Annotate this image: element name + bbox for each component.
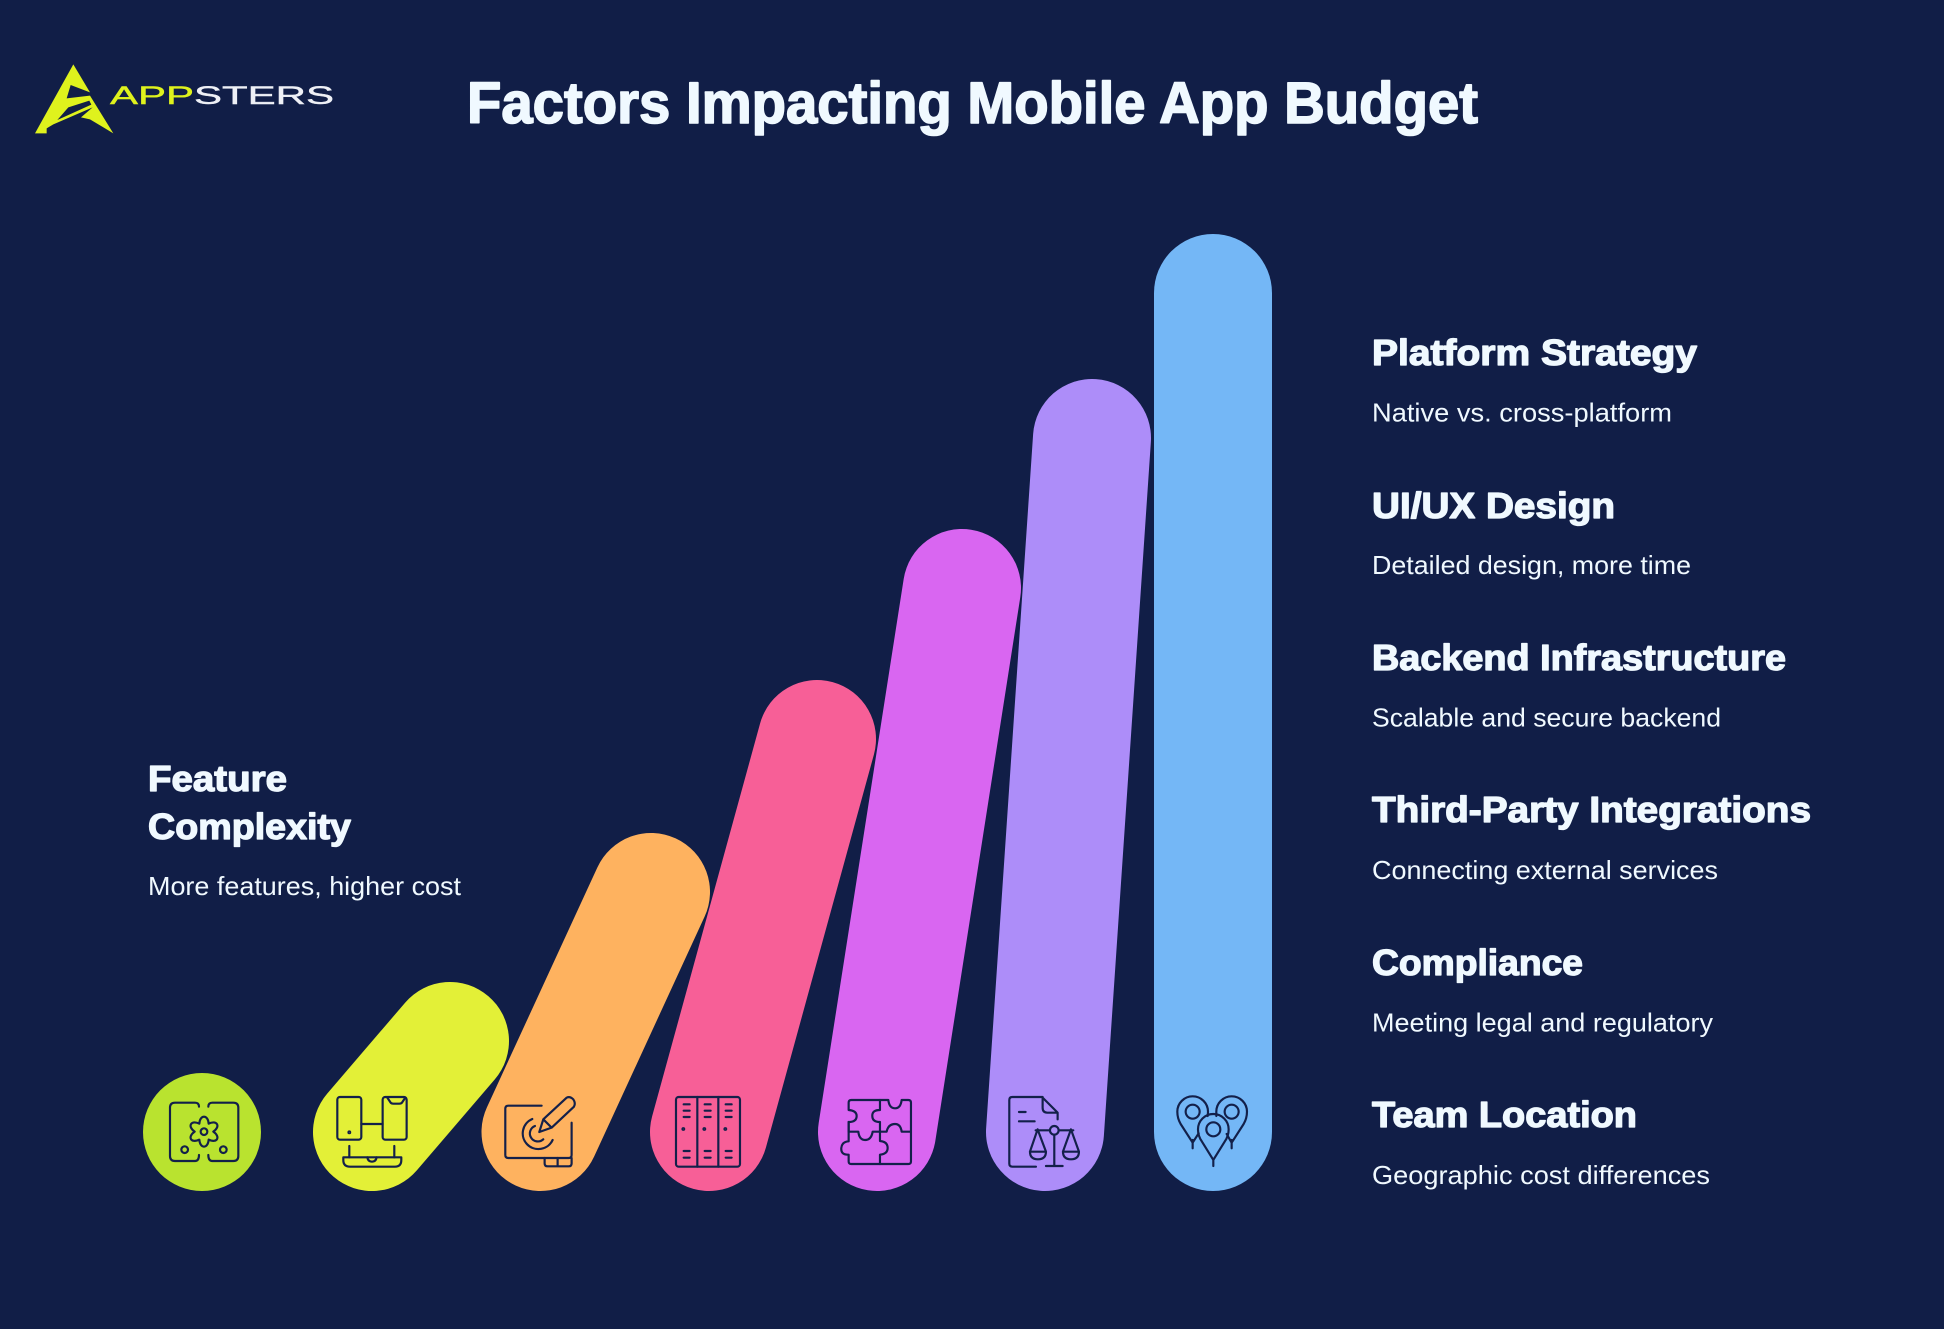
icon: puzzle bbox=[841, 1100, 911, 1164]
bar: blue bbox=[1154, 293, 1272, 1132]
description: Native vs. cross-platform bbox=[1372, 398, 1672, 428]
icon: phones and laptop bbox=[337, 1097, 407, 1167]
icon: location pins bbox=[1177, 1096, 1247, 1166]
bar: orange bbox=[540, 892, 651, 1132]
text block: Feature Complexity bbox=[148, 758, 462, 901]
description: More features, higher cost bbox=[148, 871, 462, 901]
description: Meeting legal and regulatory bbox=[1372, 1008, 1713, 1038]
description: Connecting external services bbox=[1372, 855, 1718, 885]
title: Factors Impacting Mobile App Budget bbox=[467, 71, 1478, 136]
text block: Backend Infrastructure bbox=[1372, 637, 1786, 732]
text block: Team Location bbox=[1372, 1094, 1710, 1190]
heading: Compliance bbox=[1372, 942, 1583, 983]
text block: Third-Party Integrations bbox=[1372, 789, 1811, 885]
icon: gear in brackets bbox=[170, 1103, 238, 1161]
heading: Feature Complexity bbox=[148, 758, 351, 847]
description: Detailed design, more time bbox=[1372, 550, 1691, 580]
logo wordmark: APP STERS bbox=[110, 82, 334, 110]
icon: tablet and pencil bbox=[505, 1097, 575, 1166]
text block: Compliance bbox=[1372, 942, 1713, 1038]
heading: Backend Infrastructure bbox=[1372, 637, 1786, 678]
icon: document and scales bbox=[1009, 1097, 1079, 1167]
bar: purple bbox=[1045, 438, 1092, 1132]
logo: Appsters bbox=[35, 64, 334, 133]
description: Scalable and secure backend bbox=[1372, 702, 1721, 732]
heading: Third-Party Integrations bbox=[1372, 789, 1811, 830]
logo mark bbox=[35, 64, 113, 133]
text block: UI/UX Design bbox=[1372, 485, 1691, 580]
bar: pink bbox=[709, 739, 817, 1132]
heading: Team Location bbox=[1372, 1094, 1637, 1135]
text block: Platform Strategy bbox=[1372, 332, 1697, 428]
description: Geographic cost differences bbox=[1372, 1160, 1710, 1190]
bar: magenta bbox=[877, 588, 962, 1132]
heading: Platform Strategy bbox=[1372, 332, 1697, 373]
bar: platform-complexity lime bbox=[372, 1041, 450, 1132]
heading: Feature Complexity: Feature bbox=[148, 758, 287, 799]
heading: UI/UX Design bbox=[1372, 485, 1615, 526]
icon: server racks bbox=[676, 1097, 740, 1167]
heading: Feature Complexity: Complexity bbox=[148, 806, 351, 847]
bar: feature complexity circle bbox=[143, 1073, 261, 1191]
